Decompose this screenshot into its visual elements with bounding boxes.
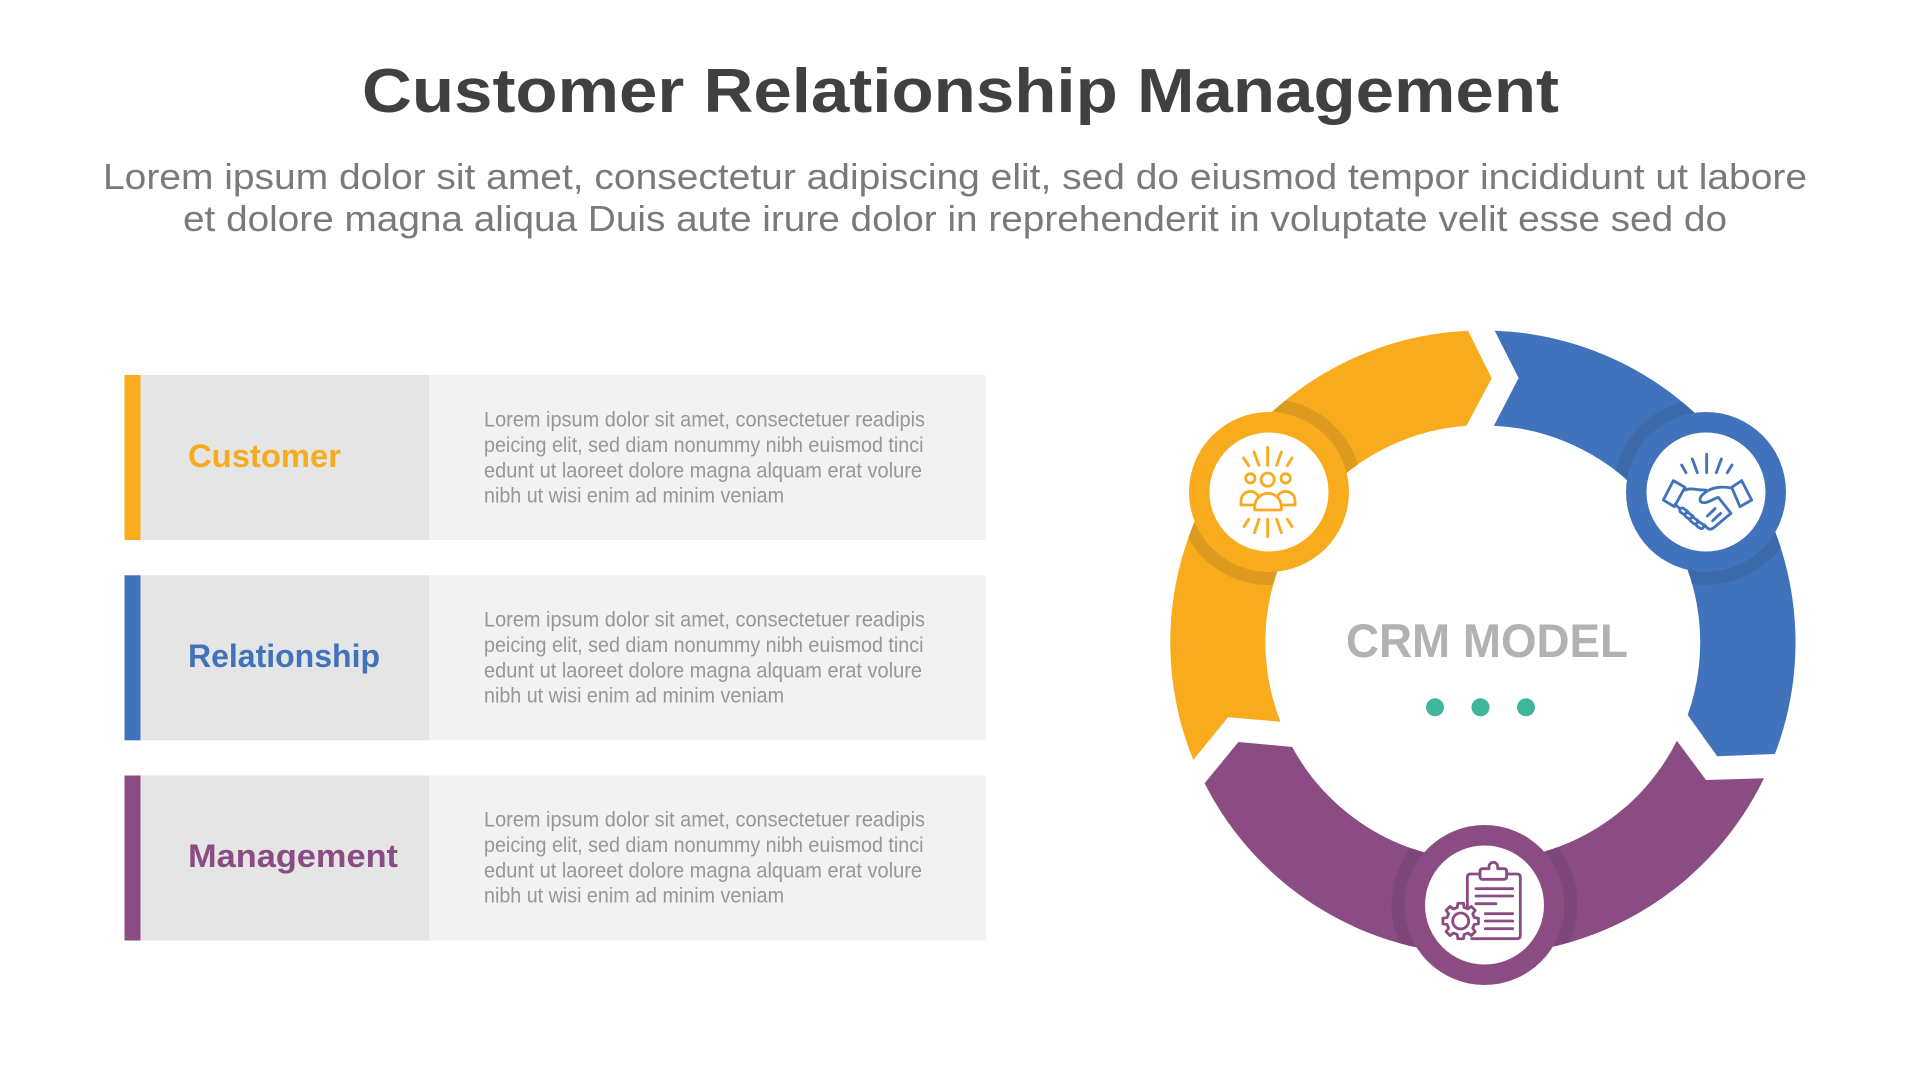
arc segment: management xyxy=(1204,740,1764,948)
arc segment: relationship xyxy=(1494,331,1799,756)
text block: management: edunt ut laoreet dolore magna alquam erat volure xyxy=(484,860,922,882)
text block: customer: nibh ut wisi enim ad minim veniam xyxy=(484,484,784,508)
text block: management: nibh ut wisi enim ad minim veniam xyxy=(484,884,784,908)
subtitle text: et dolore magna aliqua Duis aute irure dolor in reprehenderit in voluptate velit esse sed do xyxy=(183,198,1727,239)
text block: customer: Lorem ipsum dolor sit amet, consectetuer readipis xyxy=(484,408,925,432)
title: Customer Relationship Management xyxy=(362,57,1559,126)
panel: customer xyxy=(124,375,986,540)
subtitle text xyxy=(103,156,1807,239)
circular chart: CRM model xyxy=(1170,331,1799,998)
icon: customer group xyxy=(1189,412,1349,572)
icon: handshake xyxy=(1626,412,1786,572)
heading: relationship: Relationship xyxy=(188,638,380,674)
text block: customer xyxy=(484,408,925,508)
text block: management: peicing elit, sed diam nonummy nibh euismod tinci xyxy=(484,834,924,857)
icon: clipboard and gear xyxy=(1404,825,1564,985)
text block: customer: edunt ut laoreet dolore magna alquam erat volure xyxy=(484,460,922,482)
text block: relationship: Lorem ipsum dolor sit amet, consectetuer readipis xyxy=(484,608,925,632)
text block: relationship: nibh ut wisi enim ad minim veniam xyxy=(484,684,784,708)
text block: relationship xyxy=(484,608,925,708)
text block: management xyxy=(484,808,925,908)
three dots xyxy=(1426,698,1535,716)
heading: management: Management xyxy=(188,838,398,874)
text block: management: Lorem ipsum dolor sit amet, consectetuer readipis xyxy=(484,808,925,832)
text block: relationship: edunt ut laoreet dolore magna alquam erat volure xyxy=(484,660,922,682)
center label: CRM MODEL xyxy=(1346,614,1628,667)
panel: management xyxy=(124,776,986,940)
heading: customer: Customer xyxy=(188,438,341,474)
panel: relationship xyxy=(124,575,986,740)
arc segment: customer xyxy=(1170,331,1492,760)
text block: relationship: peicing elit, sed diam nonummy nibh euismod tinci xyxy=(484,634,924,657)
text block: customer: peicing elit, sed diam nonummy nibh euismod tinci xyxy=(484,434,924,457)
subtitle text: Lorem ipsum dolor sit amet, consectetur adipiscing elit, sed do eiusmod tempor incididunt ut labore xyxy=(103,156,1807,197)
